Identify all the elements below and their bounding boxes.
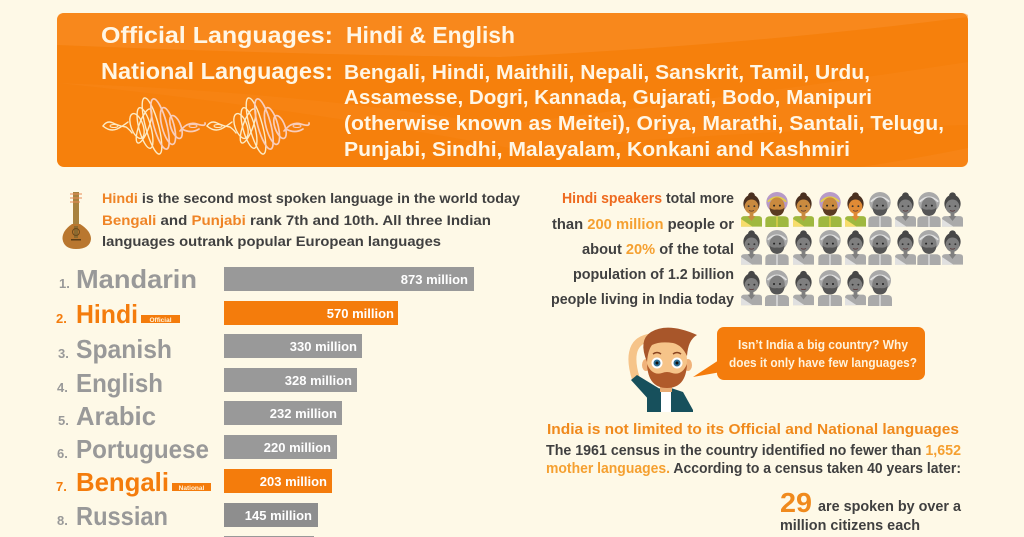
national languages list: Punjabi, Sindhi, Malayalam, Konkani and Kashmiri <box>344 139 850 161</box>
row 2: Hindi <box>56 299 398 329</box>
row 2: Hindi: 570 million <box>327 306 394 321</box>
row 3: Spanish <box>58 334 362 364</box>
icon: ornamental flourishes <box>103 96 309 156</box>
pictogram: people icons <box>741 192 963 306</box>
row 3: Spanish: 330 million <box>290 339 357 354</box>
text block: census: The 1961 census in the country identified no fewer than 1,652 <box>546 443 961 459</box>
callout: speech bubble: Isn’t India a big country? Why <box>738 338 908 352</box>
row 8: Russian: Russian <box>76 501 168 531</box>
row 6: Portuguese: 6. <box>57 446 68 461</box>
row 2: Hindi: 2. <box>56 311 67 326</box>
text block: ranking intro: Hindi is the second most spoken language in the world today <box>102 190 520 206</box>
row 7: Bengali: 203 million <box>260 474 327 489</box>
row 7: Bengali <box>56 467 332 497</box>
stat: 29 languages: million citizens each <box>780 518 920 534</box>
row 6: Portuguese: 220 million <box>264 440 331 455</box>
row 2: Hindi: Hindi <box>76 299 138 329</box>
row 6: Portuguese: Portuguese <box>76 434 209 464</box>
row 7: Bengali: 7. <box>56 479 67 494</box>
text block: Hindi speakers: than 200 million people or <box>552 217 734 233</box>
icon: puzzled man <box>631 328 697 412</box>
row 4: English <box>57 368 357 398</box>
text block: ranking intro: languages outrank popular European languages <box>102 233 441 249</box>
stat: 29 languages: 29 <box>780 487 812 518</box>
row 4: English: 4. <box>57 380 68 395</box>
grey people <box>741 192 963 306</box>
row 4: English: 328 million <box>285 373 352 388</box>
row 1: Mandarin: 873 million <box>401 272 468 287</box>
text block: Hindi speakers: Hindi speakers total more <box>562 191 734 207</box>
row 5: Arabic <box>58 401 342 431</box>
row 1: Mandarin: Mandarin <box>76 264 197 294</box>
text block: Hindi speakers: people living in India today <box>551 292 734 308</box>
row 8: Russian: 145 million <box>245 508 312 523</box>
heading: official languages: Official Languages: <box>101 22 333 48</box>
national languages list: Assamesse, Dogri, Kannada, Gujarati, Bodo, Manipuri <box>344 87 872 109</box>
row 1: Mandarin <box>59 264 474 294</box>
national languages list: (otherwise known as Meitei), Oriya, Marathi, Santali, Telugu, <box>344 113 944 135</box>
row 3: Spanish: 3. <box>58 346 69 361</box>
official languages value: Hindi & English <box>346 22 515 48</box>
row 9: partial bar <box>224 536 314 537</box>
heading: not limited: India is not limited to its Official and National languages <box>547 422 959 438</box>
row 5: Arabic: 232 million <box>270 406 337 421</box>
row 8: Russian <box>57 501 318 531</box>
row 7: Bengali: Bengali <box>76 467 169 497</box>
row 2: Hindi: Official <box>149 317 172 324</box>
text block: census <box>546 443 961 477</box>
text block: Hindi speakers: about 20% of the total <box>582 242 734 258</box>
text block: Hindi speakers <box>551 191 734 308</box>
row 6: Portuguese <box>57 434 337 464</box>
icon: sitar <box>62 192 91 249</box>
row 8: Russian: 8. <box>57 513 68 528</box>
text block: census: mother languages. According to a census taken 40 years later: <box>546 461 961 477</box>
national languages list <box>344 62 944 161</box>
stat: 29 languages: are spoken by over a <box>818 499 962 515</box>
row 1: Mandarin: 1. <box>59 276 70 291</box>
callout: speech bubble <box>693 327 925 380</box>
text block: Hindi speakers: population of 1.2 billion <box>573 267 734 283</box>
callout: speech bubble: does it only have few languages? <box>729 356 917 370</box>
row 3: Spanish: Spanish <box>76 334 172 364</box>
row 5: Arabic: 5. <box>58 413 69 428</box>
row 7: Bengali: National <box>179 485 205 492</box>
text block: ranking intro <box>102 190 520 249</box>
text block: ranking intro: Bengali and Punjabi rank 7th and 10th. All three Indian <box>102 212 491 228</box>
national languages list: Bengali, Hindi, Maithili, Nepali, Sanskrit, Tamil, Urdu, <box>344 62 870 84</box>
row 4: English: English <box>76 368 163 398</box>
bar chart: most spoken languages <box>56 264 474 537</box>
coloured people <box>741 192 866 227</box>
heading: national languages: National Languages: <box>101 58 333 84</box>
stat: 29 languages <box>780 487 962 534</box>
panel: languages banner <box>57 13 968 167</box>
row 5: Arabic: Arabic <box>76 401 156 431</box>
